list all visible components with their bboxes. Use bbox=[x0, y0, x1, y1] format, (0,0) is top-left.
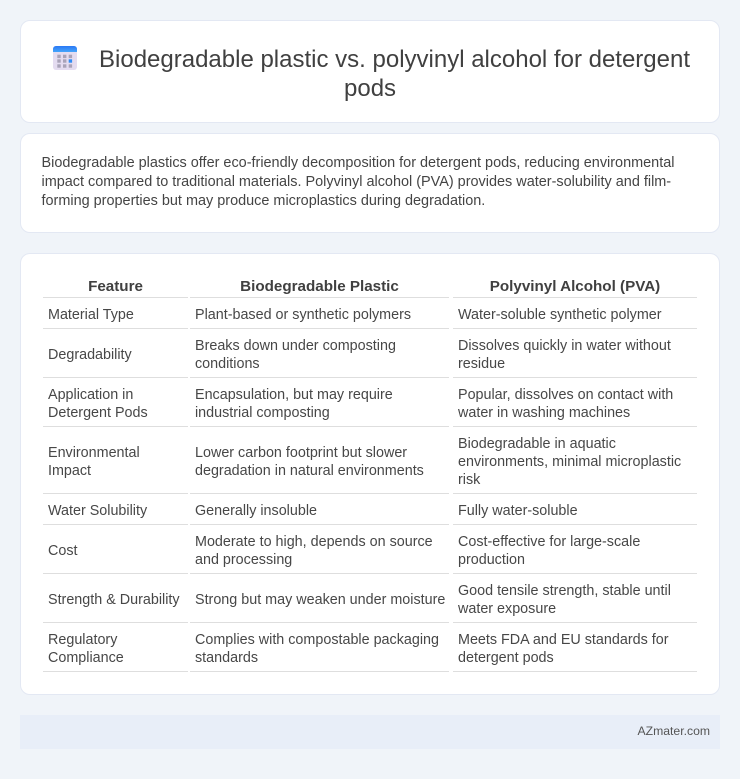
panel: description card bbox=[20, 133, 720, 233]
table header: Polyvinyl Alcohol: Polyvinyl Alcohol (PVA) bbox=[490, 278, 660, 295]
table row: Application in Detergent Pods: water in washing machines bbox=[458, 405, 630, 421]
table row: Cost: Cost bbox=[48, 543, 78, 559]
table row: Material Type: Material Type bbox=[48, 307, 134, 323]
table row: Strength & Durability: Strength & Durability bbox=[48, 592, 180, 608]
table row: Water Solubility: Fully water-soluble bbox=[458, 503, 578, 519]
text block: description: Biodegradable plastics offer eco-friendly decomposition for detergent pods, reducing environmental bbox=[42, 155, 674, 171]
table row: Regulatory Compliance: Complies with compostable packaging bbox=[195, 632, 439, 648]
table row: Water Solubility: Water Solubility bbox=[48, 503, 147, 519]
panel: comparison table card bbox=[20, 253, 720, 695]
table row: Environmental Impact: Impact bbox=[48, 463, 91, 479]
table row: Environmental Impact: Environmental bbox=[48, 445, 140, 461]
title: pods bbox=[344, 75, 396, 102]
table row: Regulatory Compliance: Meets FDA and EU standards for bbox=[458, 632, 668, 648]
table row: Cost: and processing bbox=[195, 552, 292, 568]
icon: calendar grid bbox=[53, 46, 77, 70]
panel: title card bbox=[20, 20, 720, 123]
footer bar bbox=[20, 715, 720, 749]
table row: Regulatory Compliance bbox=[48, 632, 668, 666]
table row: Strength & Durability: Strong but may weaken under moisture bbox=[195, 592, 445, 608]
table row: Environmental Impact: environments, minimal microplastic bbox=[458, 454, 681, 470]
table header: Biodegradable Plastic: Biodegradable Plastic bbox=[240, 278, 399, 295]
table row: Strength & Durability bbox=[48, 583, 671, 617]
table row: Degradability: conditions bbox=[195, 356, 260, 372]
table row: Application in Detergent Pods bbox=[48, 387, 673, 421]
title: Biodegradable plastic vs. polyvinyl alcohol for detergent bbox=[99, 46, 690, 73]
table row: Regulatory Compliance: Compliance bbox=[48, 650, 124, 666]
table row: Application in Detergent Pods: Encapsulation, but may require bbox=[195, 387, 393, 403]
title bbox=[99, 46, 690, 102]
table row: Environmental Impact bbox=[48, 436, 681, 488]
table row: Regulatory Compliance: detergent pods bbox=[458, 650, 554, 666]
table row: Environmental Impact: Biodegradable in aquatic bbox=[458, 436, 616, 452]
table row: Strength & Durability: water exposure bbox=[458, 601, 556, 617]
table row: Degradability: Dissolves quickly in water without bbox=[458, 338, 671, 354]
table row: Material Type bbox=[48, 307, 662, 323]
table row: Regulatory Compliance: standards bbox=[195, 650, 258, 666]
table row: Material Type: Water-soluble synthetic polymer bbox=[458, 307, 662, 323]
table row: Degradability: residue bbox=[458, 356, 505, 372]
table row: Environmental Impact: risk bbox=[458, 472, 480, 488]
table row: Cost: production bbox=[458, 552, 525, 568]
table row: Application in Detergent Pods: industrial composting bbox=[195, 405, 330, 421]
table header: Feature: Feature bbox=[88, 278, 143, 295]
table row: Water Solubility bbox=[48, 503, 578, 519]
table row: Application in Detergent Pods: Detergent Pods bbox=[48, 405, 148, 421]
table row: Cost: Moderate to high, depends on source bbox=[195, 534, 433, 550]
table row: Water Solubility: Generally insoluble bbox=[195, 503, 317, 519]
table row: Strength & Durability: Good tensile strength, stable until bbox=[458, 583, 671, 599]
footer credit: AZmater.com bbox=[638, 724, 710, 738]
table row: Environmental Impact: Lower carbon footprint but slower bbox=[195, 445, 407, 461]
table row: Degradability: Degradability bbox=[48, 347, 132, 363]
text block: description bbox=[42, 155, 674, 209]
table row: Material Type: Plant-based or synthetic polymers bbox=[195, 307, 411, 323]
table row: Environmental Impact: degradation in natural environments bbox=[195, 463, 424, 479]
text block: description: forming properties but may produce microplastics during degradation. bbox=[42, 193, 485, 209]
table row: Cost: Cost-effective for large-scale bbox=[458, 534, 640, 550]
text block: description: impact compared to traditional materials. Polyvinyl alcohol (PVA) provides water-solubility and film- bbox=[42, 174, 671, 190]
table row: Application in Detergent Pods: Popular, dissolves on contact with bbox=[458, 387, 673, 403]
table row: Regulatory Compliance: Regulatory bbox=[48, 632, 117, 648]
table row: Application in Detergent Pods: Application in bbox=[48, 387, 133, 403]
table row: Degradability bbox=[48, 338, 671, 372]
table row: Cost bbox=[48, 534, 640, 568]
table row: Degradability: Breaks down under composting bbox=[195, 338, 396, 354]
